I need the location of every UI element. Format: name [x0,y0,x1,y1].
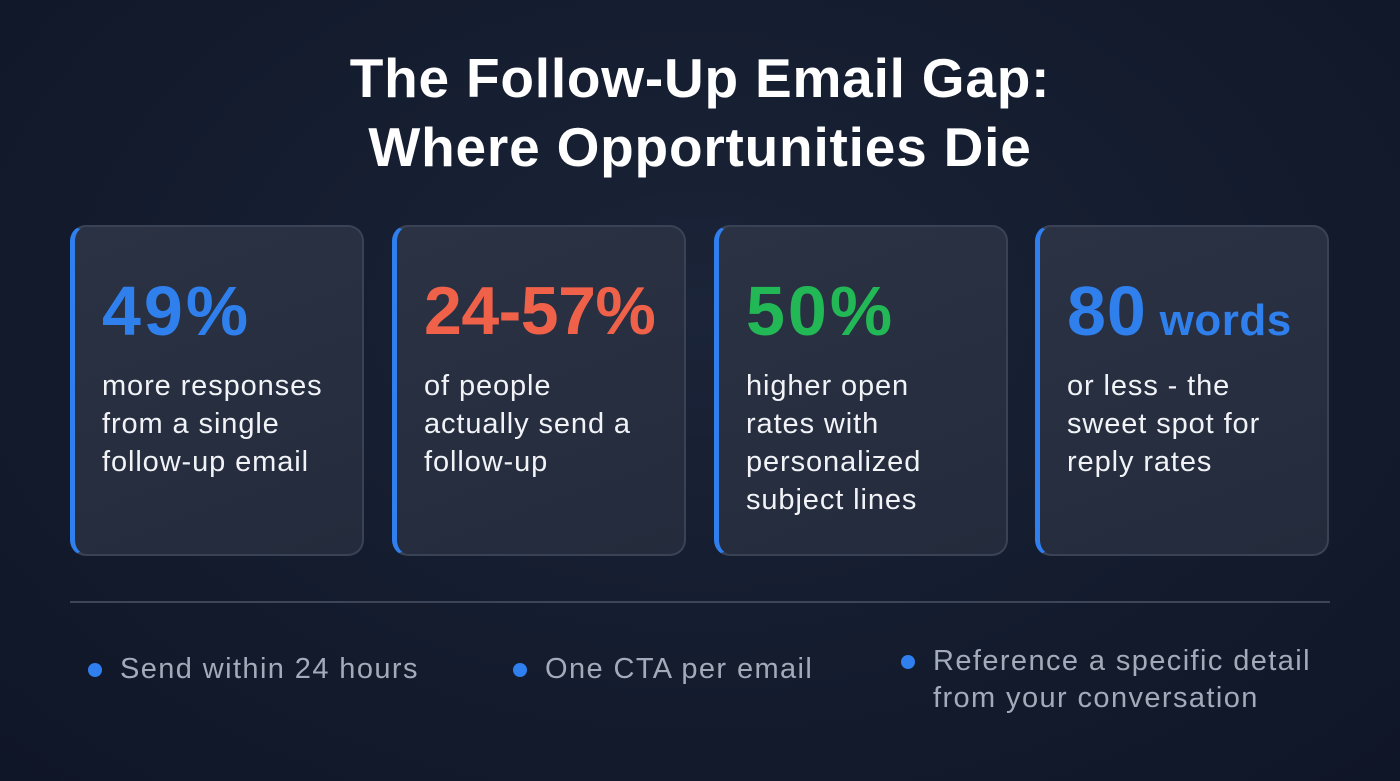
text: 24-57% description: of people [424,370,551,402]
stat: 49%: 49% [102,272,251,350]
stat: 80 words: 80 words [1067,272,1292,350]
panel: 50% [714,225,1008,556]
title: The Follow-Up Email Gap: [350,47,1050,109]
bullet: reference detail: Reference a specific detail [933,645,1311,677]
stat: 50%: 50% [746,272,895,350]
title: Where Opportunities Die [368,116,1032,178]
text: 80 words description [1067,370,1260,478]
bullet: send within 24 hours: Send within 24 hours [120,653,419,685]
panel: 80 words [1035,225,1329,556]
text: 50% description: subject lines [746,484,917,516]
text: 49% description: follow-up email [102,446,309,478]
text: 50% description: higher open [746,370,909,402]
text: 24-57% description: follow-up [424,446,548,478]
text: 49% description: from a single [102,408,280,440]
stat: 24-57%: 24-57% [424,273,655,349]
bullet: reference detail [901,645,1311,714]
panel: 24-57% [392,225,686,556]
text: 50% description: personalized [746,446,921,478]
text: 80 words description: sweet spot for [1067,408,1260,440]
bullet: reference detail: from your conversation [933,682,1259,714]
text: 24-57% description [424,370,631,478]
text: 80 words description: or less - the [1067,370,1230,402]
panel: 49% [70,225,364,556]
title [350,47,1050,178]
text: 49% description: more responses [102,370,323,402]
text: 50% description [746,370,921,516]
text: 24-57% description: actually send a [424,408,631,440]
text: 49% description [102,370,323,478]
bullet: one CTA: One CTA per email [545,653,813,685]
text: 50% description: rates with [746,408,879,440]
text: 80 words description: reply rates [1067,446,1212,478]
